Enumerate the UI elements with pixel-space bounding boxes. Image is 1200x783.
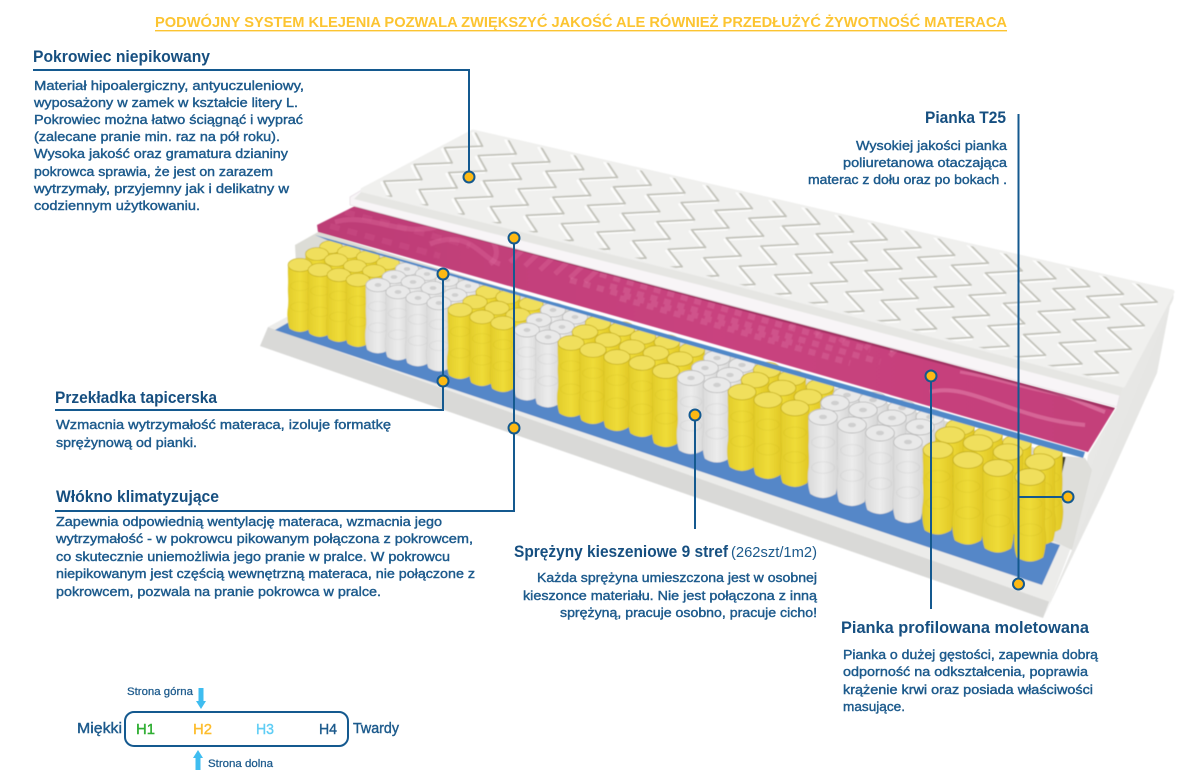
- H2: H2: [193, 721, 212, 738]
- H1: H1: [136, 721, 155, 738]
- text block: Przekładka tapicerska: Przekładka tapicerska: [55, 388, 217, 407]
- text block: Włókno klimatyzujące: niepikowanym jest częścią wewnętrzną materaca, nie połączone z: [56, 566, 475, 581]
- text block: Sprężyny kieszeniowe: sprężyną, pracuje osobno, pracuje cicho!: [560, 605, 817, 620]
- text block: Pianka profilowana moletowana: masujące.: [843, 699, 905, 714]
- soft label: Miękki: [77, 720, 122, 737]
- callout leader: Włókno klimatyzujące: [55, 232, 520, 511]
- text block: Pianka profilowana moletowana: [841, 618, 1099, 714]
- text block: Pianka profilowana moletowana: Pianka profilowana moletowana: [841, 618, 1090, 637]
- text block: Pokrowiec niepikowany: Pokrowiec można łatwo ściągnąć i wyprać: [34, 112, 304, 127]
- text block: Przekładka tapicerska: Wzmacnia wytrzymałość materaca, izoluje formatkę: [56, 417, 391, 432]
- text block: Włókno klimatyzujące: Włókno klimatyzujące: [56, 487, 219, 506]
- base top foam: [268, 312, 1072, 602]
- text block: Pianka profilowana moletowana: odporność na odkształcenia, poprawia: [843, 664, 1089, 679]
- mattress base front strip: [260, 327, 1050, 618]
- dark end of spring cavity: [1035, 455, 1066, 540]
- mattress illustration: [260, 129, 1174, 618]
- text block: Pianka T25: Pianka T25: [925, 108, 1006, 127]
- text block: Pianka T25: Wysokiej jakości pianka: [856, 138, 1008, 153]
- quilted cover top: [324, 129, 1172, 398]
- spring zone 6 white: [677, 351, 756, 463]
- callout leader: Pianka profilowana: [926, 370, 936, 609]
- mattress right side foam: [1043, 293, 1174, 618]
- text block: Sprężyny kieszeniowe: Każda sprężyna umieszczona jest w osobnej: [537, 570, 817, 585]
- text block: Pianka T25: [808, 108, 1008, 187]
- text block: Włókno klimatyzujące: pokrowcem, pozwala na pranie pokrowca w pralce.: [56, 584, 381, 599]
- pocket springs: [287, 241, 1063, 562]
- text block: Pianka profilowana moletowana: krążenie krwi oraz posiada właściwości: [843, 682, 1093, 697]
- scale box: [125, 712, 348, 746]
- white cover slab edge: [350, 188, 1123, 407]
- text block: Pianka T25: poliuretanowa otaczająca: [843, 155, 1008, 170]
- text block: Pokrowiec niepikowany: Pokrowiec niepikowany: [33, 47, 211, 66]
- pink profiled foam: [317, 205, 1115, 452]
- text block: Pokrowiec niepikowany: wytrzymały, przyjemny jak i delikatny w: [33, 181, 290, 196]
- hard label: Twardy: [353, 720, 399, 737]
- text block: Pianka T25: materac z dołu oraz po bokach .: [808, 172, 1007, 187]
- text block: Sprężyny kieszeniowe: kieszonce materiału. Nie jest połączona z inną: [523, 588, 818, 603]
- blue fibre floor: [275, 317, 1060, 585]
- inner end panel: [1047, 456, 1092, 550]
- text block: Pokrowiec niepikowany: Materiał hipoalergiczny, antyuczuleniowy,: [34, 78, 304, 93]
- callout leader: Przekładka tapicerska: [55, 268, 448, 410]
- text block: Pianka profilowana moletowana: Pianka o dużej gęstości, zapewnia dobrą: [843, 647, 1099, 662]
- title: PODWÓJNY SYSTEM KLEJENIA POZWALA ZWIĘKSZYĆ JAKOŚĆ ALE RÓWNIEŻ PRZEDŁUŻYĆ ŻYWOTNOŚĆ MATERACA: [155, 13, 1007, 31]
- text block: Przekładka tapicerska: sprężynową od pianki.: [56, 435, 197, 450]
- spring zone 1 yellow: [287, 241, 400, 347]
- text block: Sprężyny kieszeniowe: (262szt/1m2): [731, 545, 817, 561]
- arrow: top side: [196, 688, 206, 709]
- top side label: Strona górna: [127, 686, 194, 698]
- text block: Pokrowiec niepikowany: [33, 47, 304, 213]
- spring zone 8 white: [808, 387, 945, 523]
- bottom side label: Strona dolna: [208, 758, 274, 770]
- text block: Pokrowiec niepikowany: pokrowca sprawia, że jest on zarazem: [34, 164, 273, 179]
- text block: Pokrowiec niepikowany: codziennym użytkowaniu.: [34, 198, 200, 213]
- blue upholstery spacer: [315, 235, 1085, 458]
- text block: Sprężyny kieszeniowe: Sprężyny kieszeniowe 9 stref: [514, 542, 728, 561]
- text block: Przekładka tapicerska: [55, 388, 391, 450]
- text block: Włókno klimatyzujące: Zapewnia odpowiednią wentylację materaca, wzmacnia jego: [56, 514, 442, 529]
- text block: Pokrowiec niepikowany: Wysoka jakość oraz gramatura dzianiny: [34, 146, 289, 161]
- spring zone 2 white: [365, 262, 480, 371]
- cover lip shading: [354, 190, 1123, 396]
- spring zone 5 yellow: [557, 316, 705, 447]
- callout leader: Pokrowiec niepikowany: [33, 70, 474, 182]
- spring zone 3 yellow: [447, 285, 544, 392]
- text block: Włókno klimatyzujące: [55, 487, 475, 599]
- spring zone 7 yellow: [727, 362, 835, 487]
- text block: Włókno klimatyzujące: co skutecznie uniemożliwia jego pranie w pralce. W pokrowcu: [56, 549, 450, 564]
- callout leader: Pianka T25: [1013, 114, 1074, 590]
- callout leader: Sprężyny kieszeniowe: [690, 410, 700, 529]
- text block: Pokrowiec niepikowany: wyposażony w zamek w kształcie litery L.: [33, 95, 298, 110]
- arrow: bottom side: [193, 750, 203, 770]
- back wall of spring cavity: [295, 232, 1065, 540]
- H4: H4: [319, 721, 337, 738]
- spring zone 9 yellow: [922, 419, 1063, 562]
- text block: Pokrowiec niepikowany: (zalecane pranie min. raz na pół roku).: [34, 129, 280, 144]
- text block: Włókno klimatyzujące: wytrzymałość - w pokrowcu pikowanym połączona z pokrowcem,: [55, 531, 473, 546]
- H3: H3: [256, 721, 274, 738]
- hardness scale: [77, 686, 399, 770]
- spring zone 4 white: [514, 303, 588, 408]
- text block: Sprężyny kieszeniowe: [514, 542, 818, 620]
